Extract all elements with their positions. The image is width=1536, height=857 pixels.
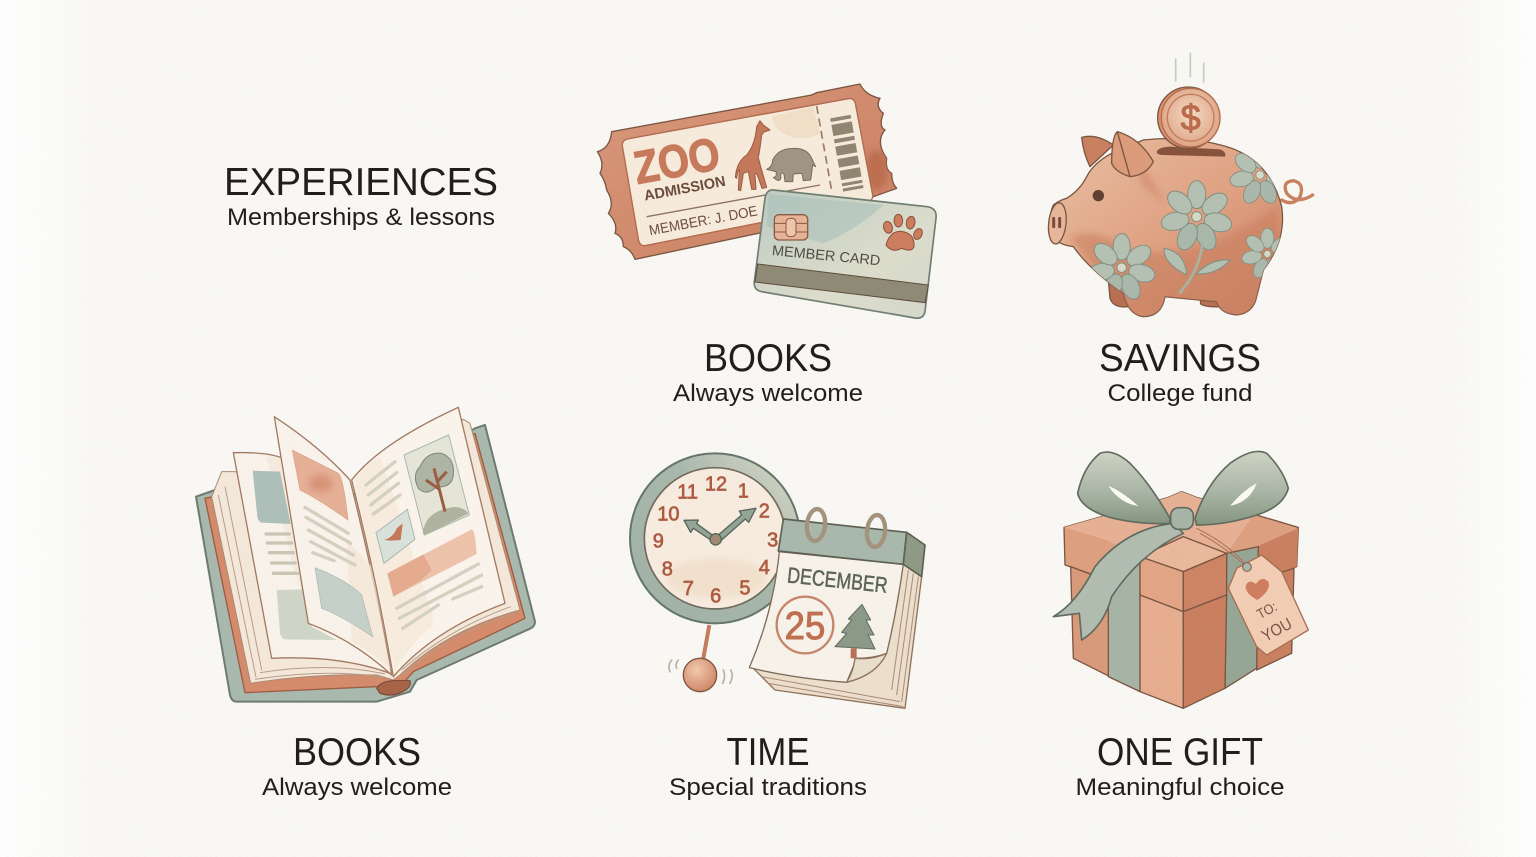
left page	[233, 453, 390, 673]
icon: piggy bank	[1047, 53, 1313, 317]
right page bird picture	[376, 509, 415, 563]
label: one gift	[1076, 731, 1284, 801]
admission label: ADMISSION	[643, 174, 727, 205]
gift tag: YOU	[1258, 614, 1295, 646]
label: savings: College fund	[1108, 380, 1252, 407]
calendar page	[749, 552, 903, 682]
ribbon tail	[1053, 523, 1183, 640]
label: time: Special traditions	[669, 774, 867, 801]
label: time	[669, 731, 867, 801]
gift tag	[1228, 555, 1308, 655]
clock numerals: 11	[677, 481, 698, 503]
member card	[754, 190, 936, 318]
gift tag: TO:	[1254, 598, 1280, 622]
clock numerals: 2	[759, 500, 770, 522]
lid top faces	[1064, 492, 1253, 557]
label: savings: SAVINGS	[1099, 337, 1261, 380]
red endpaper	[205, 433, 525, 693]
zoo ticket	[597, 84, 897, 259]
label: books	[673, 337, 863, 407]
ear inner fold	[1117, 132, 1130, 177]
clock body	[630, 453, 800, 623]
clock numerals: 9	[653, 530, 664, 552]
back lid	[1064, 492, 1298, 580]
clock pendulum	[669, 625, 732, 692]
ribbon bands	[1108, 557, 1140, 692]
right body	[1257, 568, 1294, 670]
christmas tree	[835, 604, 875, 649]
coin	[1158, 87, 1220, 148]
pig body	[1050, 138, 1283, 317]
clock hands	[684, 508, 756, 545]
giraffe	[735, 121, 770, 191]
label: books: Always welcome	[673, 380, 863, 407]
paw print	[882, 214, 924, 250]
card label: MEMBER CARD	[771, 243, 881, 269]
member name: MEMBER: J. DOE	[648, 203, 759, 239]
clock numerals: 1	[738, 480, 749, 502]
front box corner	[1140, 595, 1227, 708]
bow right loop	[1195, 451, 1288, 525]
bow left loop	[1078, 452, 1170, 524]
page stacks	[212, 419, 520, 683]
heading: experiences: EXPERIENCES	[224, 161, 498, 204]
clock numerals: 10	[657, 504, 679, 526]
label: one gift: Meaningful choice	[1076, 774, 1284, 801]
near ear	[1112, 132, 1153, 177]
far ear	[1082, 136, 1113, 167]
right page banner and text lines	[366, 462, 482, 628]
page curl	[847, 653, 887, 682]
label: one gift: ONE GIFT	[1097, 731, 1263, 774]
clock numerals: 7	[683, 578, 694, 600]
left body	[1071, 567, 1110, 677]
pig tail	[1282, 181, 1313, 203]
label: books: BOOKS	[293, 731, 421, 774]
right page	[352, 407, 505, 677]
label: books: BOOKS	[704, 337, 832, 380]
body wash and flowers	[1070, 144, 1294, 317]
heading: experiences: Memberships & lessons	[227, 204, 495, 231]
clock numerals: 12	[705, 474, 727, 496]
coin slot	[1157, 147, 1225, 157]
bow knot	[1171, 508, 1193, 529]
front lid corner	[1140, 537, 1227, 612]
icon: open book	[196, 407, 535, 702]
tag string	[1197, 528, 1247, 567]
month label: DECEMBER	[786, 562, 889, 598]
label: time: TIME	[726, 731, 810, 774]
clock numerals: 5	[739, 578, 751, 600]
label: savings	[1099, 337, 1261, 407]
turning page	[274, 417, 392, 675]
coin: $	[1181, 97, 1201, 138]
eye	[1093, 190, 1104, 201]
clock numerals: 3	[767, 529, 778, 551]
right page tree picture	[404, 435, 469, 535]
heading: experiences	[224, 161, 498, 231]
nostrils	[1054, 218, 1060, 227]
book spine	[377, 681, 410, 695]
clock numerals	[653, 474, 778, 607]
clock numerals: 4	[759, 557, 770, 579]
calendar sheets	[753, 564, 922, 708]
pig back legs	[1108, 280, 1219, 307]
left page blocks and text lines	[253, 471, 337, 640]
clock numerals: 8	[662, 559, 673, 581]
barcode	[830, 115, 864, 192]
label: books: Always welcome	[262, 774, 452, 801]
zoo wordmark: ZOO	[630, 127, 724, 194]
turning page artwork	[292, 450, 373, 637]
calendar rings	[805, 508, 887, 548]
calendar binder	[778, 519, 925, 577]
date circle	[777, 597, 833, 653]
book cover	[196, 425, 535, 702]
label: books	[262, 731, 452, 801]
card chip	[774, 215, 808, 240]
icon: clock and calendar	[630, 453, 925, 708]
snout	[1047, 202, 1068, 245]
date circle: 25	[785, 605, 825, 648]
ticket perforation	[817, 106, 832, 193]
falling motion lines	[1176, 53, 1204, 83]
elephant	[767, 148, 816, 182]
icon: gift box	[1053, 451, 1308, 708]
clock numerals: 6	[710, 585, 721, 607]
icon: zoo ticket and member card	[597, 84, 936, 318]
magnetic stripe	[755, 264, 928, 303]
